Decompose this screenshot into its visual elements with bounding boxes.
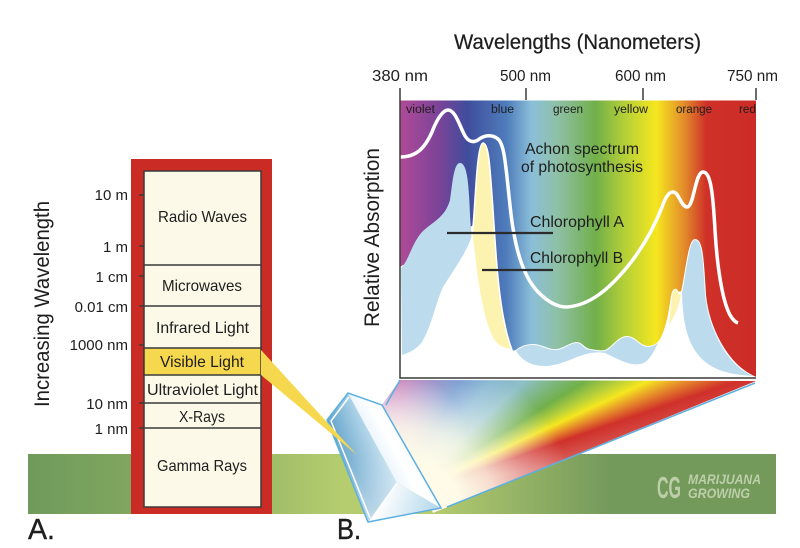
column band labels — [147, 209, 259, 475]
nanometer scale labels: 600 nm — [615, 68, 666, 85]
colour names: red — [739, 104, 756, 116]
wavelength scale ticks and labels: 10 nm — [86, 396, 128, 413]
nanometer scale labels: 500 nm — [500, 68, 551, 85]
action spectrum label: of photosynthesis — [521, 159, 643, 176]
beam edge lines — [386, 380, 755, 507]
column band labels: X-Rays — [179, 409, 225, 426]
electromagnetic spectrum column — [131, 159, 272, 514]
colour names: orange — [676, 104, 712, 116]
column band labels: Visible Light — [160, 354, 245, 371]
chlorophyll A absorption — [401, 163, 753, 376]
column band labels: Gamma Rays — [157, 458, 247, 475]
column band labels: Microwaves — [162, 278, 242, 295]
spectrum background — [400, 100, 756, 378]
wavelength scale ticks and labels: 1 m — [103, 239, 128, 256]
column band labels: Infrared Light — [156, 320, 250, 337]
action spectrum curve — [400, 110, 738, 323]
colour names: blue — [491, 104, 514, 116]
colour names: violet — [406, 104, 436, 116]
column band labels: Radio Waves — [158, 209, 247, 226]
logo: MARIJUANA — [688, 471, 761, 487]
chlorophyll B absorption — [472, 143, 681, 350]
wavelength scale ticks and labels: 1 nm — [95, 421, 128, 438]
chlorophyll B label: Chlorophyll B — [530, 250, 623, 267]
wavelength scale ticks and labels: 1 cm — [95, 269, 128, 286]
logo — [657, 470, 761, 505]
panel letter A: A. — [28, 514, 55, 546]
axis title: relative absorption: Relative Absorption — [361, 148, 384, 327]
nanometer scale labels — [372, 68, 778, 85]
chart title: Wavelengths (Nanometers) — [454, 31, 701, 54]
yellow light ray to prism — [261, 350, 357, 455]
rainbow beam from prism — [382, 380, 756, 513]
prism — [327, 393, 441, 522]
column red frame — [131, 159, 272, 514]
logo: CG — [657, 470, 681, 505]
logo: GROWING — [688, 485, 750, 501]
panel letter B: B. — [337, 514, 361, 546]
wavelength scale ticks and labels: 1000 nm — [70, 337, 128, 354]
action spectrum label — [521, 141, 643, 176]
column cream panel — [144, 171, 261, 507]
action spectrum label: Achon spectrum — [525, 141, 639, 158]
wavelength scale ticks and labels — [70, 187, 144, 438]
nanometer scale labels: 380 nm — [372, 68, 428, 85]
axis title: increasing wavelength: Increasing Wavelength — [31, 201, 54, 407]
green ground band — [28, 454, 776, 514]
colour names: green — [553, 104, 583, 116]
wavelength scale ticks and labels: 0.01 cm — [75, 299, 128, 316]
column band labels: Ultraviolet Light — [147, 382, 259, 399]
chlorophyll A label: Chlorophyll A — [530, 214, 624, 231]
chart axes and ticks — [400, 88, 756, 378]
absorption chart — [400, 88, 756, 378]
white area under curves — [400, 227, 756, 378]
nanometer scale labels: 750 nm — [727, 68, 778, 85]
colour names — [406, 104, 756, 116]
colour names: yellow — [614, 104, 649, 116]
visible light band — [144, 348, 261, 375]
wavelength scale ticks and labels: 10 m — [95, 187, 128, 204]
